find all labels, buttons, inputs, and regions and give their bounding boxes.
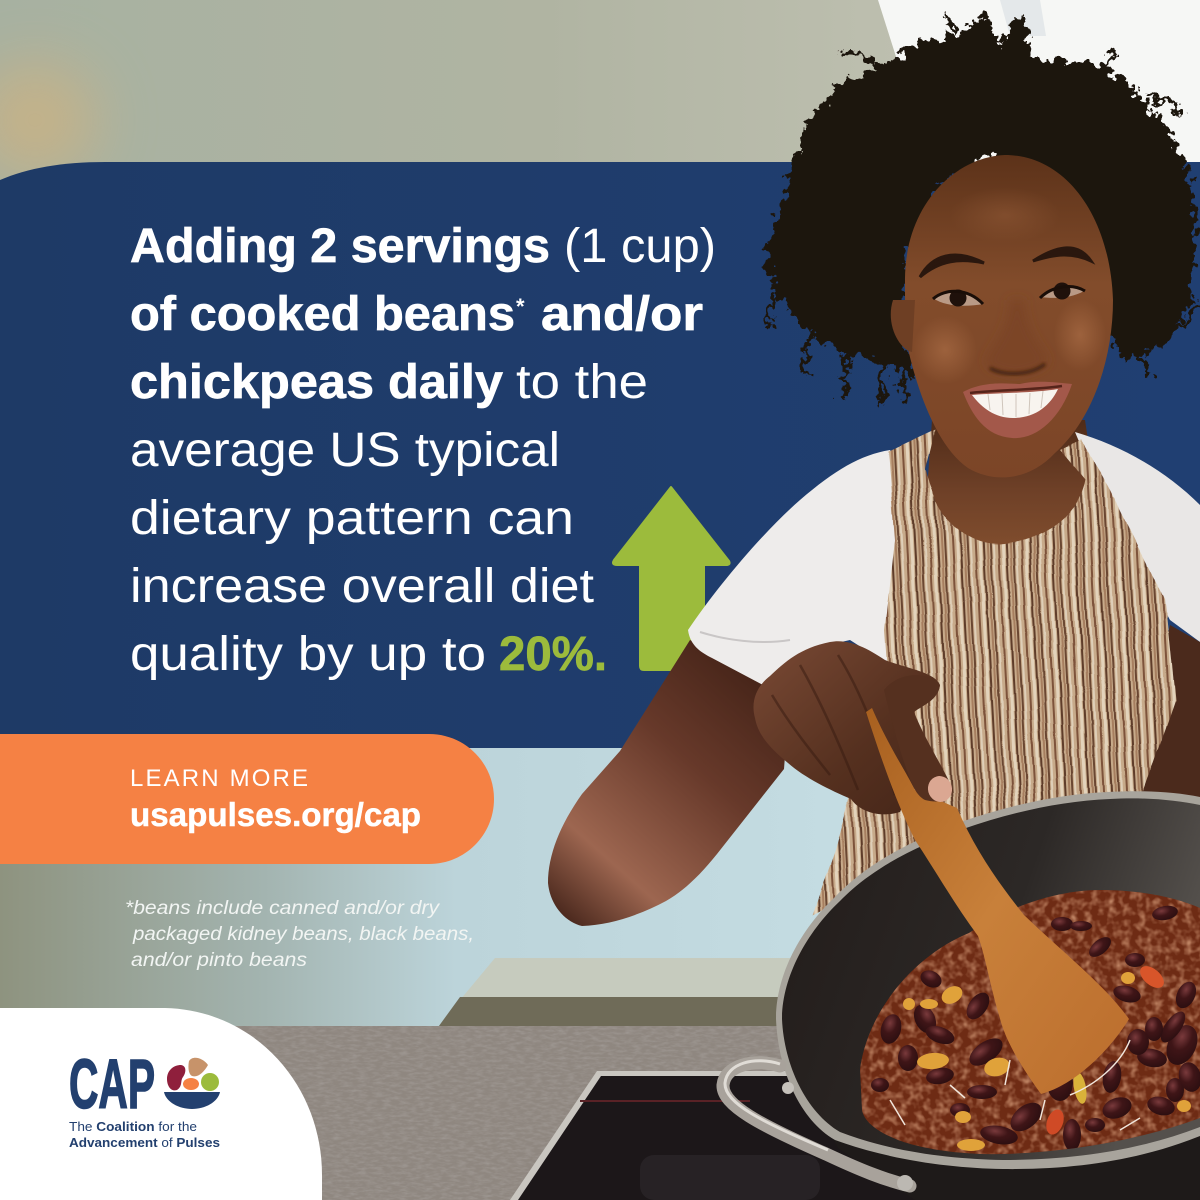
logo: CAP: Advancement of Pulses	[69, 1136, 220, 1150]
fingernail	[925, 773, 955, 805]
headline text: and/or	[541, 288, 703, 341]
logo: CAP: CAP	[69, 1045, 155, 1123]
cooktop	[510, 1071, 930, 1200]
near arm	[548, 640, 790, 926]
icon: pulses in bowl	[164, 1058, 220, 1109]
headline text: *	[516, 294, 525, 319]
photo: smiling woman cooking	[548, 12, 1200, 1200]
wooden spoon	[866, 708, 1129, 1094]
glints on chili	[890, 1040, 1140, 1130]
neck and chest	[925, 420, 1100, 560]
headline text: Adding 2 servings	[130, 220, 550, 273]
index finger over spoon	[884, 675, 953, 802]
hand	[753, 641, 940, 814]
panel: learn more call to action	[0, 734, 494, 864]
woman's hair	[765, 12, 1198, 405]
white t-shirt	[688, 432, 1200, 686]
headline text: 20%.	[499, 628, 607, 681]
footnote: *beans include canned and/or dry	[125, 898, 441, 919]
headline text: dietary pattern can	[130, 492, 574, 545]
headline text: to the	[516, 356, 648, 409]
footnote	[125, 898, 474, 971]
headline text: (1 cup)	[564, 220, 716, 273]
nose	[986, 300, 1048, 376]
footnote: and/or pinto beans	[131, 950, 308, 971]
pot handle	[723, 1061, 913, 1191]
chili with beans	[855, 885, 1200, 1160]
striped apron	[812, 430, 1175, 915]
kidney beans	[871, 904, 1200, 1151]
icon: upward green arrow	[613, 487, 730, 670]
eyebrows	[920, 255, 984, 277]
headline text: increase overall diet	[130, 560, 594, 613]
panel: learn more call to action: usapulses.org/cap	[130, 796, 421, 833]
panel: learn more call to action: LEARN MORE	[130, 765, 308, 792]
footnote: packaged kidney beans, black beans,	[132, 924, 474, 945]
corn and pepper pieces	[903, 962, 1191, 1151]
face	[891, 155, 1113, 477]
panel: navy message background	[0, 162, 1200, 748]
headline text: of cooked beans	[130, 288, 515, 341]
headline text	[130, 220, 716, 681]
far arm	[1130, 625, 1200, 800]
headline text: average US typical	[130, 424, 560, 477]
smile	[963, 382, 1072, 438]
cooking pot	[776, 791, 1200, 1200]
headline text: chickpeas daily	[130, 356, 503, 409]
eyes	[933, 293, 983, 306]
panel: logo background	[0, 1008, 322, 1200]
headline text: quality by up to	[130, 628, 486, 681]
logo: CAP: The Coalition for the	[69, 1120, 197, 1134]
